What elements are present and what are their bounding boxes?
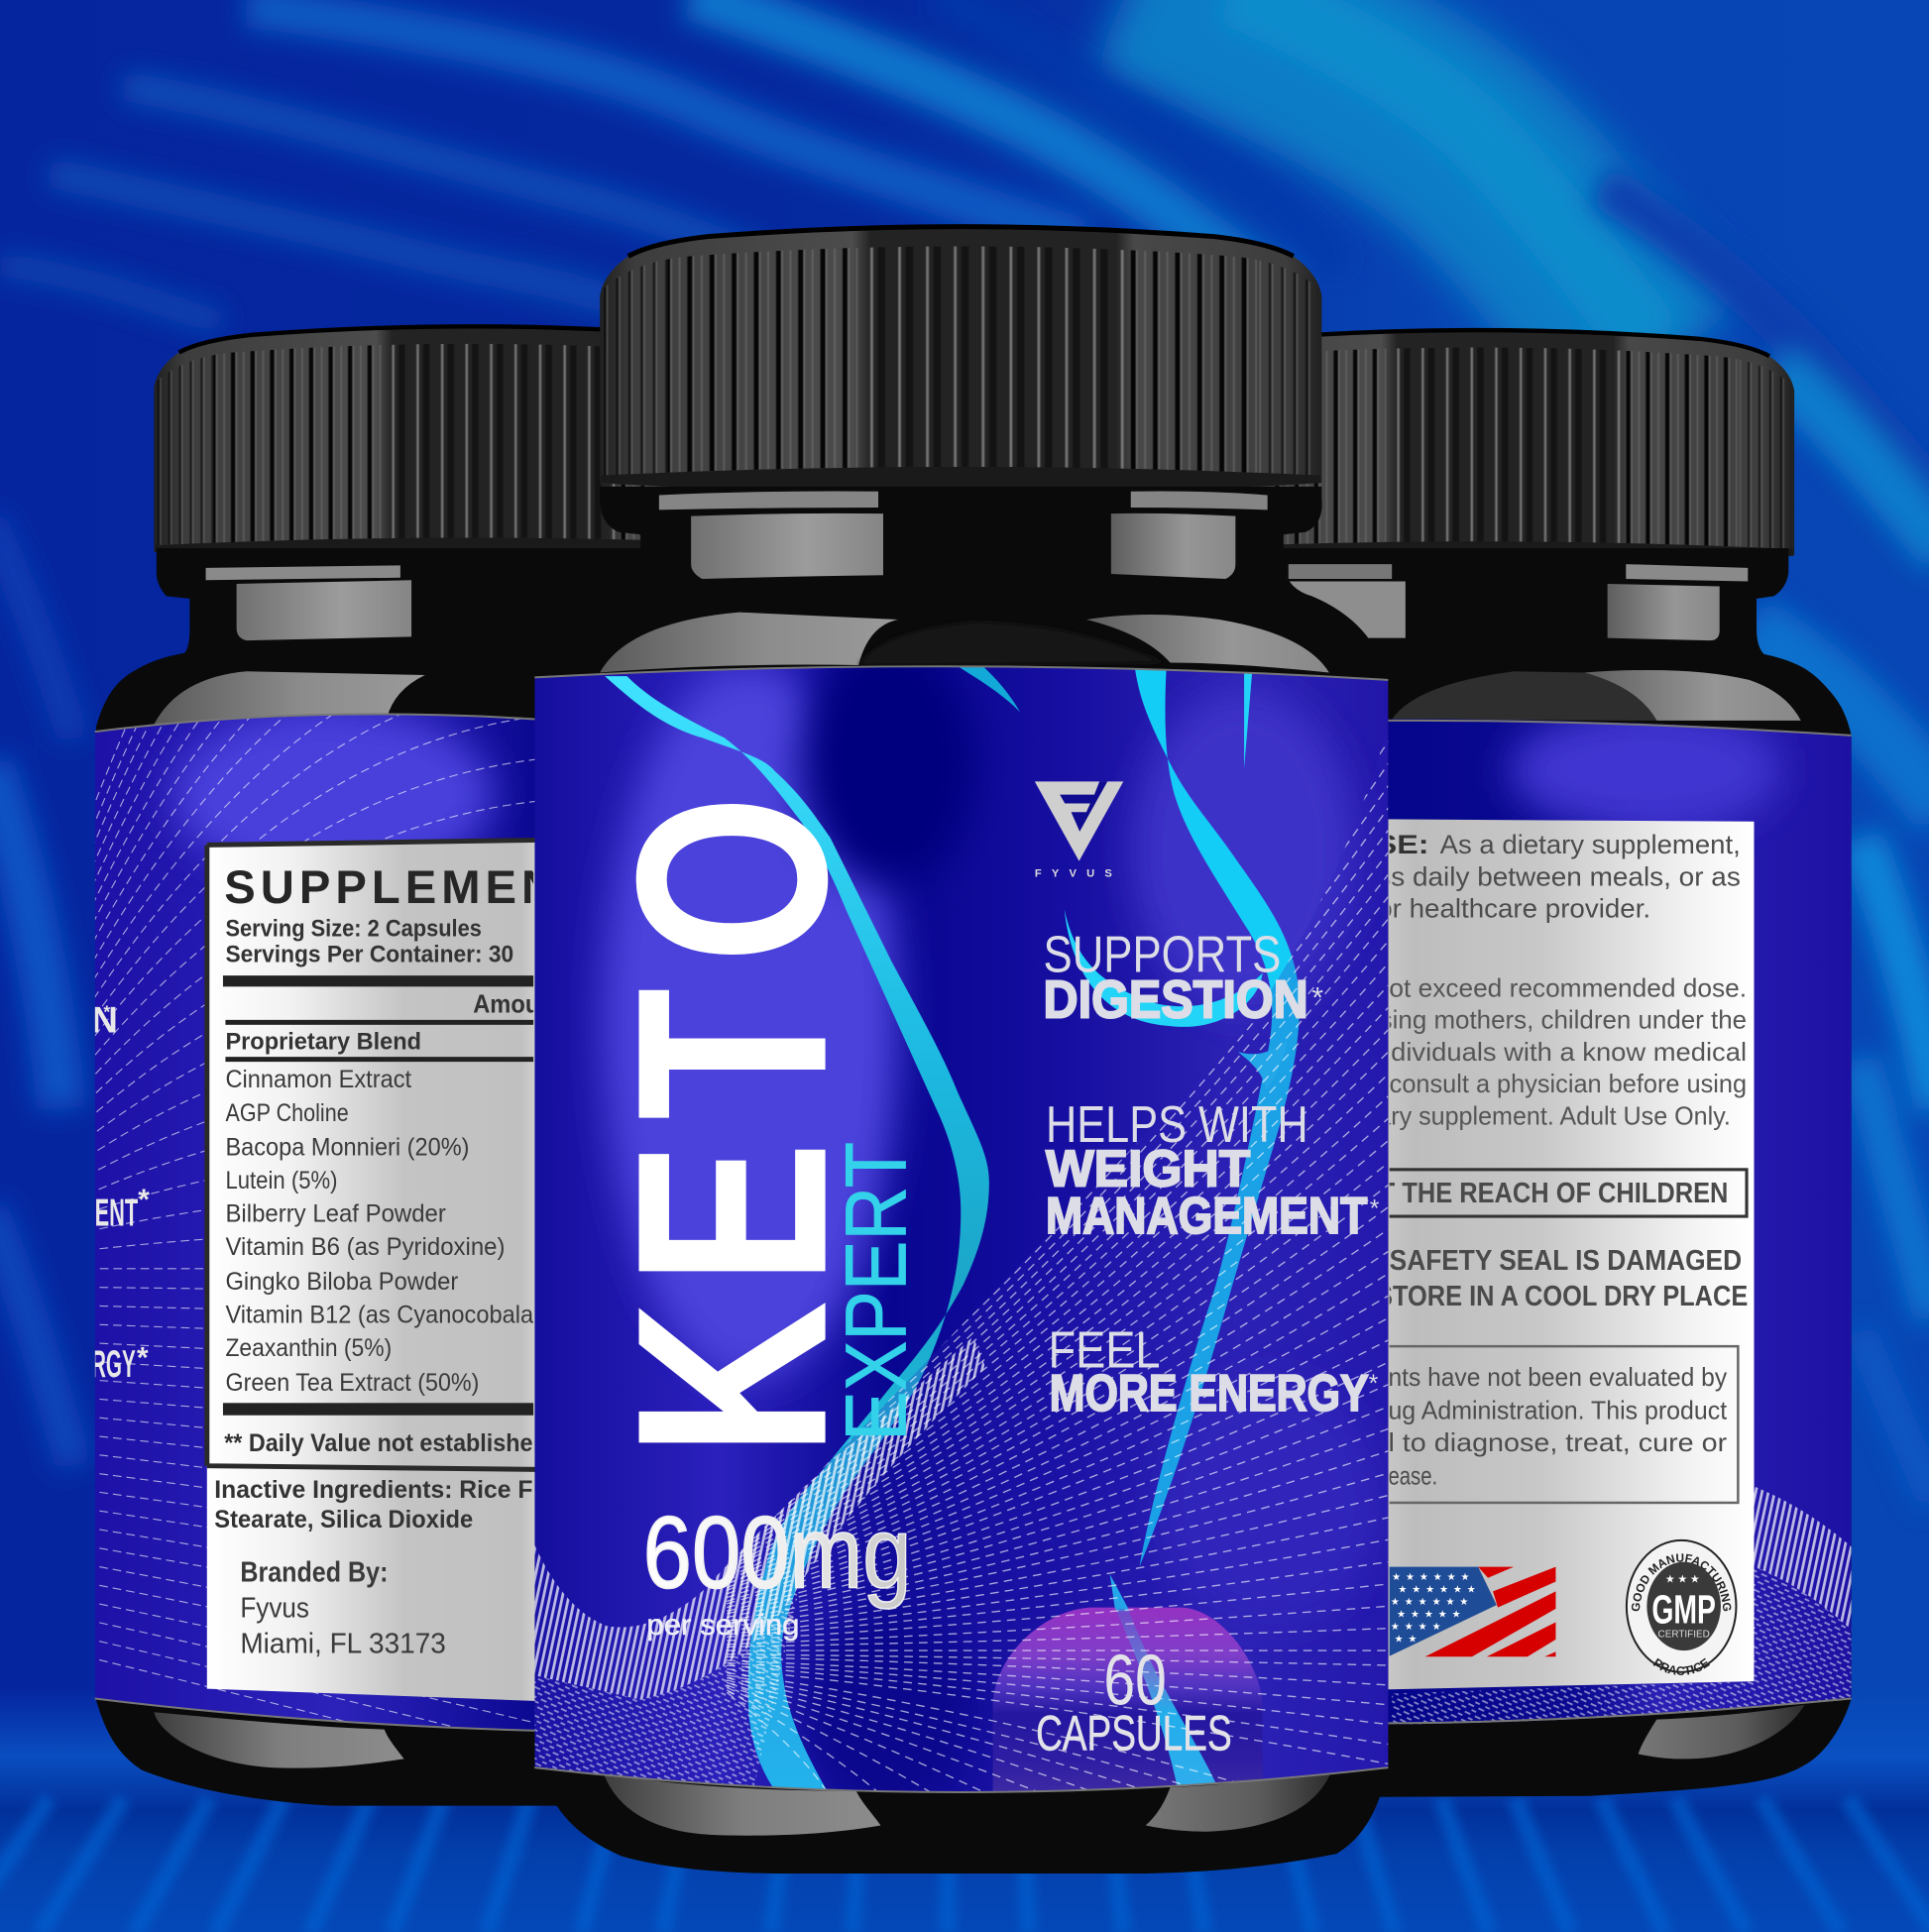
capsule count text [1036,1642,1232,1762]
FDA disclaimer box: nts have not been evaluated by [1388,1362,1727,1392]
cyan swoosh: top accent [956,665,1020,712]
icon: american flag: ★★★★★★ [1392,1572,1474,1583]
cyan swoosh: main left curve [605,676,989,1792]
dosage: 600mg: 600mg [643,1496,912,1610]
dense mesh band [533,1336,985,1700]
left bottle wrapped claims: * [138,1184,150,1216]
icon: GMP certified badge: GMP [1651,1587,1716,1633]
ingredient list: Vitamin B12 (as Cyanocobalamin) [225,1303,579,1329]
warning text: consult a physician before using [1390,1069,1747,1098]
ingredient list: Bilberry Leaf Powder [225,1201,446,1228]
ingredient list: Cinnamon Extract [225,1067,411,1093]
safety seal notice [1376,1245,1748,1312]
daily value note and inactive ingredients: Stearate, Silica Dioxide [214,1507,473,1534]
FDA disclaimer box: ug Administration. This product [1388,1395,1728,1424]
claim: helps with weight management: HELPS WITH [1046,1096,1308,1154]
ingredient list: Bacopa Monnieri (20%) [225,1135,469,1162]
icon: GMP certified badge: GOOD MANUFACTURING [1632,1553,1731,1612]
suggested use text: As a dietary supplement, [1440,830,1741,859]
left neck glass highlight [237,580,411,640]
center bottle: front [529,227,1392,1874]
daily value note and inactive ingredients: Inactive Ingredients: Rice Flour [214,1477,579,1504]
right bottle: directions side [1260,327,1852,1797]
left label [95,715,535,1730]
serving information [226,919,533,1055]
claim: helps with weight management [1046,1096,1380,1245]
ingredient list: Lutein (5%) [225,1168,338,1194]
claim: supports digestion: SUPPORTS [1044,926,1281,983]
claim: feel more energy: FEEL [1048,1321,1161,1379]
icon: american flag: ★★★★★ [1397,1610,1466,1621]
keep out of reach box: T THE REACH OF CHILDREN [1380,1178,1728,1209]
icon: american flag: ★★★★★★ [1391,1597,1473,1608]
left bottle wrapped claims: * [103,1001,110,1021]
branded by block: Fyvus [240,1593,309,1625]
right neck ring highlights [1626,564,1748,582]
warning text: not exceed recommended dose. [1375,972,1747,1002]
left bottle wrapped claims [95,1005,150,1378]
icon: american flag: ★★★★ [1391,1622,1445,1633]
left bottle body [96,548,788,1806]
warning text: ary supplement. Adult Use Only. [1377,1100,1731,1130]
left bottle wrapped claims: * [137,1341,149,1374]
claim: helps with weight management: MANAGEMENT [1046,1188,1367,1245]
claim: supports digestion: DIGESTION [1044,970,1308,1029]
claim: supports digestion: * [1311,981,1323,1014]
serving information: Amount [473,988,562,1018]
claim: supports digestion [1044,926,1323,1029]
left bottle cap [154,326,789,563]
right label [1355,708,1860,1737]
ingredient list: Zeaxanthin (5%) [225,1335,392,1362]
left shoulder highlight [154,671,425,725]
claim: feel more energy: MORE ENERGY [1050,1365,1369,1422]
left bottle wrapped claims: N [91,998,118,1040]
icon: american flag [1380,1567,1555,1656]
left base highlight [154,1712,404,1768]
cyan swoosh: right body curve [1134,665,1300,1567]
branded by block: Miami, FL 33173 [240,1629,446,1660]
keep out of reach box [1355,1170,1747,1216]
icon: american flag: ★★ [1395,1634,1421,1645]
claim: feel more energy: * [1369,1371,1379,1398]
serving information: Proprietary Blend [225,1029,421,1056]
directions panel [1388,819,1755,1689]
neck glass highlights [691,513,883,579]
icon: GMP certified badge: PRACTICE [1653,1657,1710,1675]
center label [529,640,1392,1829]
product name: EXPERT: EXPERT [828,1142,924,1441]
warning text: individuals with a know medical [1370,1037,1747,1067]
suggested use text [1352,830,1741,924]
claim: feel more energy [1048,1321,1379,1422]
daily value note and inactive ingredients: ** Daily Value not established [224,1430,547,1457]
safety seal notice: STORE IN A COOL DRY PLACE [1376,1281,1748,1312]
left bottle: supplement facts side [95,324,664,1806]
FDA disclaimer box [1342,1346,1738,1503]
suggested use text: or healthcare provider. [1377,894,1650,924]
suggested use text: USE: [1352,830,1428,859]
right neck glass highlights [1608,584,1720,640]
logo: FYVUS [1035,781,1123,880]
branded by block [240,1556,446,1660]
claim: helps with weight management: * [1370,1196,1380,1223]
ingredient list: Vitamin B6 (as Pyridoxine) [225,1234,506,1261]
left bottle wrapped claims: IENT [89,1192,138,1234]
safety seal notice: SAFETY SEAL IS DAMAGED [1390,1245,1742,1277]
right label mesh [1750,1484,1860,1639]
icon: GMP certified badge: ★★★ [1665,1574,1702,1586]
claim: helps with weight management: WEIGHT [1046,1141,1250,1198]
FDA disclaimer box: ease. [1388,1460,1437,1490]
icon: GMP certified badge [1626,1538,1737,1675]
dosage note: per serving: per serving [646,1609,799,1642]
FDA disclaimer box: l to diagnose, treat, cure or [1388,1427,1728,1457]
supplement facts panel [204,838,535,1701]
daily value note and inactive ingredients [214,1430,579,1534]
branded by block: Branded By: [240,1556,388,1588]
ingredient list: Gingko Biloba Powder [225,1269,458,1296]
cyan swoosh: digestion hook [1065,909,1263,1027]
icon: american flag: ★★★★★★ [1398,1585,1481,1596]
warning text [1370,972,1747,1130]
right bottle cap [1159,330,1794,566]
right bottle body [1108,548,1852,1798]
serving information: Serving Size: 2 Capsules [225,915,482,942]
right shoulder highlight [1584,670,1801,721]
ingredient list: Green Tea Extract (50%) [225,1370,479,1397]
suggested use text: ss daily between meals, or as [1377,861,1741,891]
center bottle body [534,487,1388,1874]
cyan swoosh: lower tail [1110,1574,1218,1788]
serving information: Servings Per Container: 30 [225,941,513,967]
supplement heading: SUPPLEMENT [224,861,589,914]
capsule count text: 60 [1103,1642,1167,1721]
ingredient list: AGP Choline [225,1100,349,1127]
ingredient list [225,1067,579,1397]
logo: FYVUS: FYVUS [1035,868,1122,880]
capsule count dome [993,1608,1263,1811]
icon: GMP certified badge: CERTIFIED [1658,1629,1710,1640]
warning text: rsing mothers, children under the [1371,1005,1747,1035]
dashed wave mesh [533,720,1388,1811]
right base highlight [1639,1705,1804,1759]
left bottle wrapped claims: RGY [91,1343,136,1386]
product name: KETO: KETO [581,795,883,1457]
center bottle cap [600,227,1321,496]
left neck ring highlight [206,565,400,580]
capsule count text: CAPSULES [1036,1706,1232,1762]
shoulder highlights [600,613,898,672]
neck ring highlights [659,492,878,510]
base highlights [604,1773,881,1836]
cyan swoosh: thin top sliver [1244,665,1253,768]
